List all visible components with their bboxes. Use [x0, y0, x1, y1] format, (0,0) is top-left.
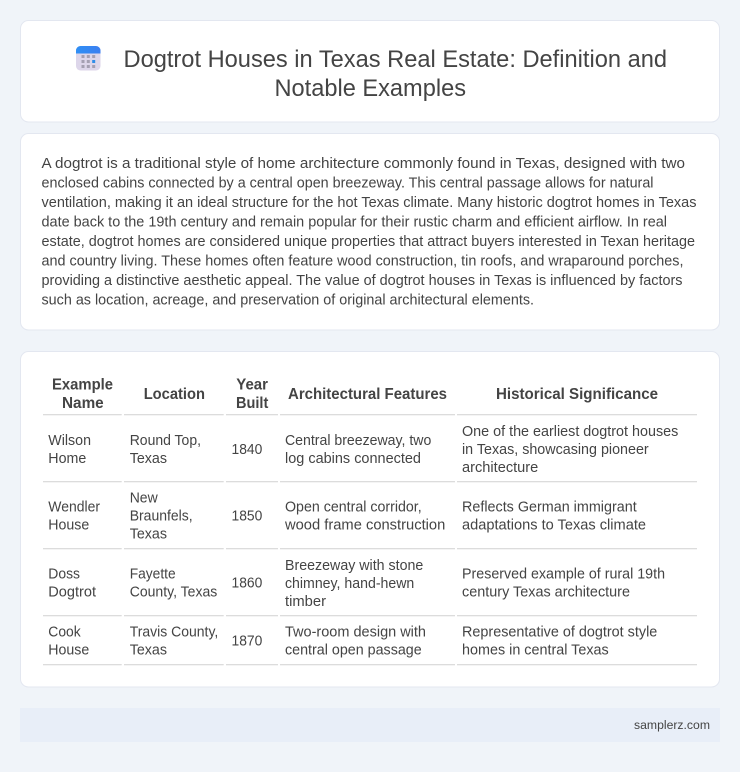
table row: Wilson Home: log cabins connected: [285, 451, 421, 467]
table header row: Built: [236, 395, 268, 412]
table header row: [52, 376, 658, 412]
table row: Cook House: [48, 625, 657, 659]
panel: table card: [20, 352, 720, 687]
table row: Doss Dogtrot: Doss: [48, 567, 80, 583]
table row: Doss Dogtrot: century Texas architecture: [462, 585, 630, 601]
table row: Cook House: central open passage: [285, 643, 422, 659]
table row: Doss Dogtrot: [48, 558, 665, 610]
table header row: Location: [144, 386, 205, 403]
table row: Wilson Home: One of the earliest dogtrot houses: [462, 424, 678, 440]
table row: Cook House: Two-room design with: [285, 625, 426, 641]
table row: Wendler House: Texas: [130, 527, 167, 543]
text block: definition paragraph: [42, 156, 696, 308]
table row: Wendler House: Open central corridor,: [285, 500, 422, 516]
text block: definition paragraph: estate, dogtrot homes are considered unique properties that attract buyers interested in Texan heritage: [42, 234, 695, 250]
text block: definition paragraph: and country living. These homes often feature wood construction, tin roofs, and wraparound porches,: [42, 254, 684, 270]
text block: definition paragraph: enclosed cabins connected by a central open breezeway. This central passage allows for natural: [42, 176, 654, 192]
table row: Cook House: Texas: [130, 643, 167, 659]
table row: Doss Dogtrot: Preserved example of rural 19th: [462, 567, 665, 583]
text block: definition paragraph: A dogtrot is a traditional style of home architecture commonly found in Texas, designed with two: [42, 156, 685, 172]
table row: Wilson Home: [48, 424, 678, 476]
table row: Doss Dogtrot: chimney, hand-hewn: [285, 576, 414, 592]
table row: Cook House: 1870: [232, 634, 262, 650]
table row: Cook House: Representative of dogtrot style: [462, 625, 657, 641]
table row: Wendler House: New: [130, 491, 158, 507]
table header row: Historical Significance: [496, 386, 658, 403]
table row: Wilson Home: in Texas, showcasing pioneer: [462, 442, 649, 458]
table row: Wendler House: adaptations to Texas climate: [462, 518, 646, 534]
table row: Doss Dogtrot: 1860: [232, 576, 262, 592]
table row: Wilson Home: architecture: [462, 460, 538, 476]
text block: definition paragraph: providing a distinctive aesthetic appeal. The value of dogtrot houses in Texas is influenced by factors: [42, 273, 682, 289]
table row: Doss Dogtrot: Dogtrot: [48, 585, 96, 601]
table header row: Architectural Features: [288, 386, 447, 403]
text block: definition paragraph: date back to the 19th century and remain popular for their rustic charm and efficient airflow. In real: [42, 214, 667, 230]
table row: Doss Dogtrot: timber: [285, 594, 326, 610]
title: [124, 46, 667, 102]
table row: Wilson Home: Central breezeway, two: [285, 433, 431, 449]
table row: Wilson Home: Round Top,: [130, 433, 201, 449]
table row: Cook House: Cook: [48, 625, 81, 641]
table row: Wilson Home: Wilson: [48, 433, 91, 449]
table row: Wendler House: 1850: [232, 509, 262, 525]
table row: Doss Dogtrot: Breezeway with stone: [285, 558, 423, 574]
table header row: Year: [236, 376, 268, 394]
table row: Cook House: homes in central Texas: [462, 643, 609, 659]
table row: Wendler House: House: [48, 518, 89, 534]
table row: Wendler House: wood frame construction: [284, 518, 445, 534]
table row: Wilson Home: Texas: [130, 451, 167, 467]
table row: Cook House: House: [48, 643, 89, 659]
table header row: Name: [62, 395, 104, 412]
table header row: Example: [52, 376, 113, 394]
panel: header card: [20, 20, 720, 122]
title: Notable Examples: [274, 75, 466, 102]
title: Dogtrot Houses in Texas Real Estate: Definition and: [124, 46, 667, 73]
icon: calendar: [76, 46, 100, 70]
panel: description card: [20, 134, 720, 330]
table row: Wilson Home: Home: [48, 451, 86, 467]
table row: Wendler House: Reflects German immigrant: [462, 500, 637, 516]
text block: definition paragraph: such as location, acreage, and preservation of original architectural elements.: [42, 292, 534, 308]
table row: Wendler House: Wendler: [48, 500, 100, 516]
table row: Doss Dogtrot: County, Texas: [130, 585, 217, 601]
table row: Wilson Home: 1840: [232, 442, 262, 458]
text block: definition paragraph: ventilation, making it an ideal structure for the hot Texas climate. Many historic dogtrot homes in Texas: [42, 195, 696, 211]
table row: Wendler House: Braunfels,: [130, 509, 193, 525]
table row: Cook House: Travis County,: [130, 625, 218, 641]
footer bar: [20, 708, 720, 742]
table row: Wendler House: [48, 491, 646, 543]
table row: Doss Dogtrot: Fayette: [130, 567, 176, 583]
footer credit: samplerz.com: [634, 718, 710, 732]
